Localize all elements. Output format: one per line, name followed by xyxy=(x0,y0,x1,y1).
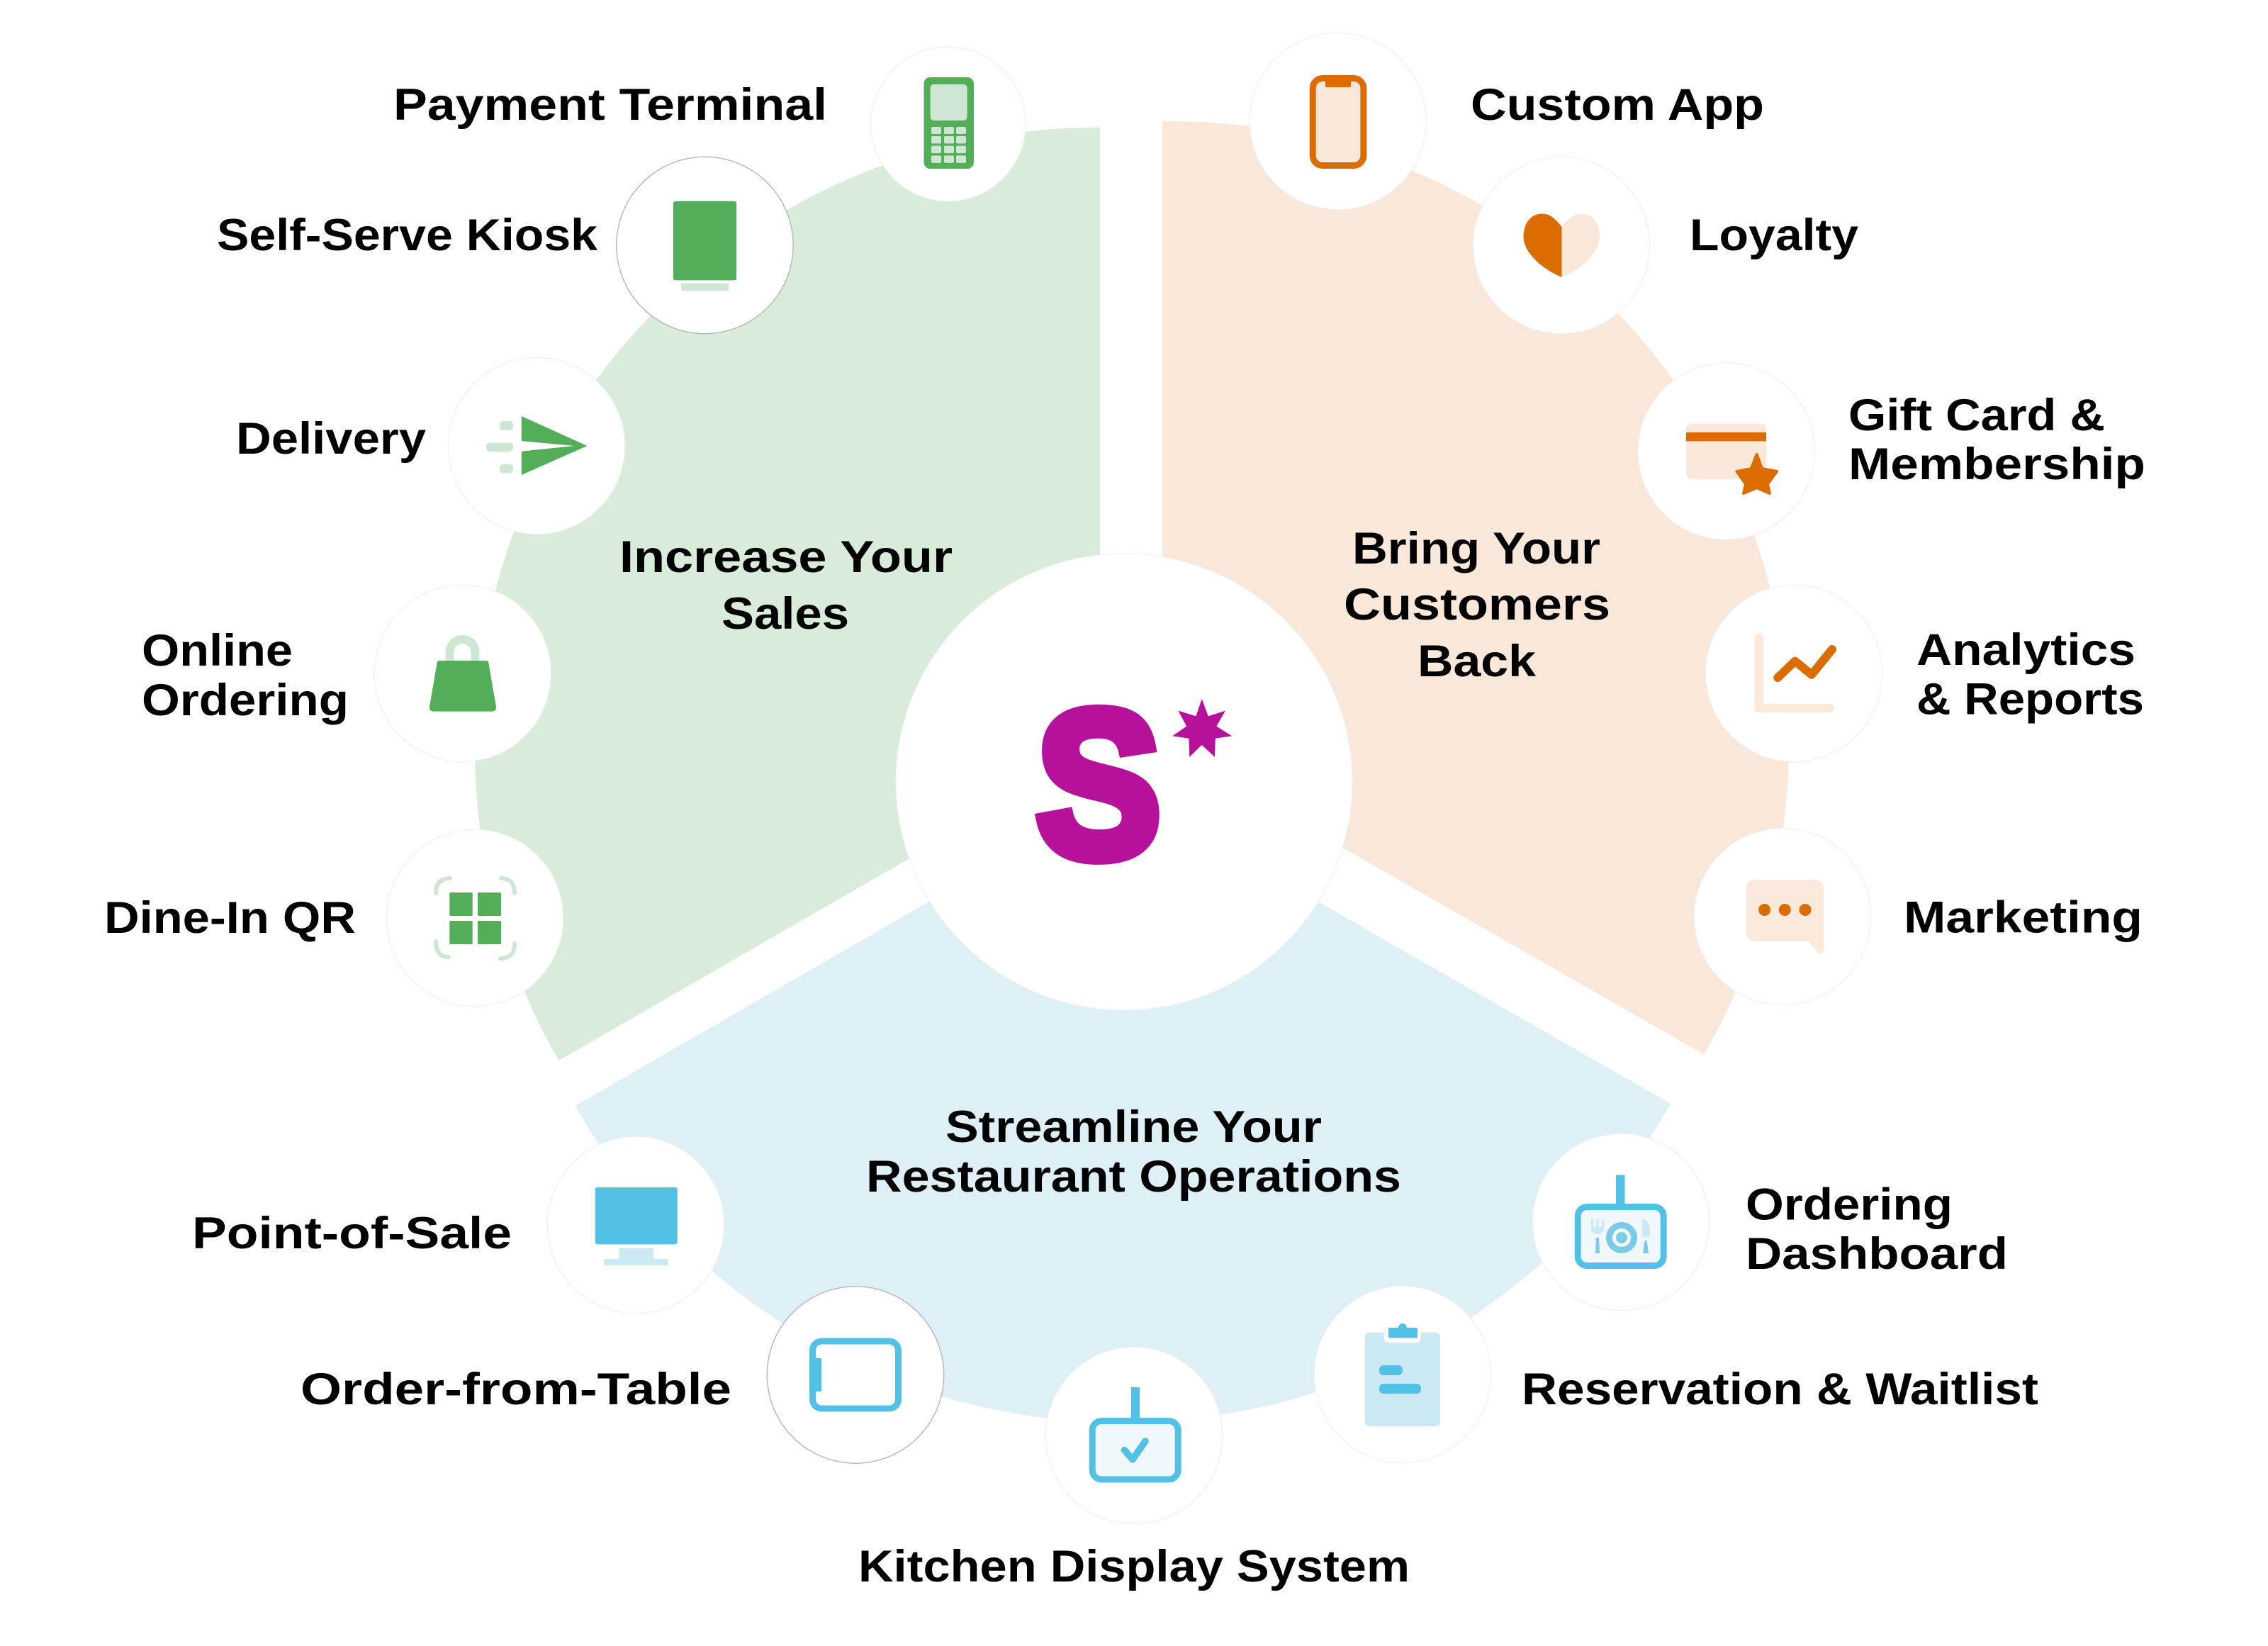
item: marketing xyxy=(1694,828,2143,1005)
item: reservation and waitlist xyxy=(1314,1286,2038,1463)
panel: increase your sales wedge xyxy=(475,128,1100,1060)
label: ordering dashboard: Ordering xyxy=(1746,1180,1953,1229)
heading: increase your sales: Sales xyxy=(722,589,849,639)
label: marketing: Marketing xyxy=(1904,893,2143,943)
label: custom app: Custom App xyxy=(1471,80,1764,130)
label: online ordering: Online xyxy=(142,626,293,676)
icon: payment terminal xyxy=(924,77,974,169)
item: payment terminal xyxy=(393,47,1026,201)
label: loyalty: Loyalty xyxy=(1690,211,1858,260)
label: self-serve kiosk: Self-Serve Kiosk xyxy=(217,211,598,260)
item: gift card and membership xyxy=(1638,363,2145,539)
label: ordering dashboard xyxy=(1746,1180,2008,1279)
heading: streamline your restaurant operations xyxy=(866,1102,1401,1202)
label: kitchen display system: Kitchen Display System xyxy=(858,1542,1410,1591)
icon: smartphone xyxy=(1313,77,1364,166)
label: gift card and membership xyxy=(1848,391,2145,489)
heading: bring your customers back xyxy=(1344,524,1610,686)
item: custom app xyxy=(1250,33,1764,210)
label: delivery: Delivery xyxy=(236,414,426,464)
label: analytics and reports xyxy=(1916,625,2144,724)
item: ordering dashboard xyxy=(1532,1133,2008,1311)
heading: bring your customers back: Bring Your xyxy=(1352,524,1600,573)
label: online ordering xyxy=(142,626,349,725)
label: point-of-sale: Point-of-Sale xyxy=(192,1209,512,1258)
icon: gift card with star xyxy=(1686,424,1777,493)
panel: bring your customers back wedge xyxy=(1162,121,1789,1054)
logo: S with star: S xyxy=(1036,668,1161,901)
item: kitchen display system xyxy=(858,1347,1410,1591)
icon: paper plane xyxy=(486,416,587,475)
icon: qr frame xyxy=(436,878,515,958)
item: loyalty xyxy=(1473,157,1858,334)
icon: speech bubble xyxy=(1746,880,1824,953)
label: dine-in qr: Dine-In QR xyxy=(104,893,356,943)
icon: clipboard xyxy=(1365,1323,1440,1426)
icon: monitor xyxy=(595,1187,678,1265)
label: payment terminal: Payment Terminal xyxy=(393,80,827,130)
label: reservation and waitlist: Reservation & Waitlist xyxy=(1522,1365,2038,1414)
label: order-from-table: Order-from-Table xyxy=(301,1365,731,1414)
icon: tablet xyxy=(812,1341,899,1409)
heading: bring your customers back: Back xyxy=(1418,637,1537,686)
item: self-serve kiosk xyxy=(217,157,793,334)
icon: line chart xyxy=(1759,638,1832,708)
label: gift card and membership: Membership xyxy=(1848,440,2145,489)
item: analytics and reports xyxy=(1705,585,2144,762)
item: dine-in qr xyxy=(104,829,563,1007)
item: delivery xyxy=(236,357,625,534)
panel: streamline operations wedge xyxy=(576,790,1671,1423)
label: analytics and reports: & Reports xyxy=(1916,675,2144,724)
icon: shopping bag xyxy=(430,639,496,712)
heading: streamline your restaurant operations: Restaurant Operations xyxy=(866,1152,1401,1202)
icon: kitchen display xyxy=(1092,1387,1178,1479)
heading: streamline your restaurant operations: Streamline Your xyxy=(945,1102,1322,1152)
label: analytics and reports: Analytics xyxy=(1916,625,2135,675)
item: online ordering xyxy=(142,585,551,762)
heading: increase your sales: Increase Your xyxy=(619,532,953,582)
label: ordering dashboard: Dashboard xyxy=(1746,1229,2008,1279)
item: order-from-table xyxy=(301,1287,944,1463)
heading: bring your customers back: Customers xyxy=(1344,580,1610,629)
icon: kiosk xyxy=(673,201,736,291)
heading: increase your sales xyxy=(619,532,953,639)
label: online ordering: Ordering xyxy=(142,676,349,725)
item: point-of-sale xyxy=(192,1136,724,1314)
label: gift card and membership: Gift Card & xyxy=(1848,391,2105,440)
icon: ordering dashboard xyxy=(1578,1175,1663,1266)
icon: heart xyxy=(1524,214,1600,277)
center logo circle xyxy=(896,554,1352,1010)
